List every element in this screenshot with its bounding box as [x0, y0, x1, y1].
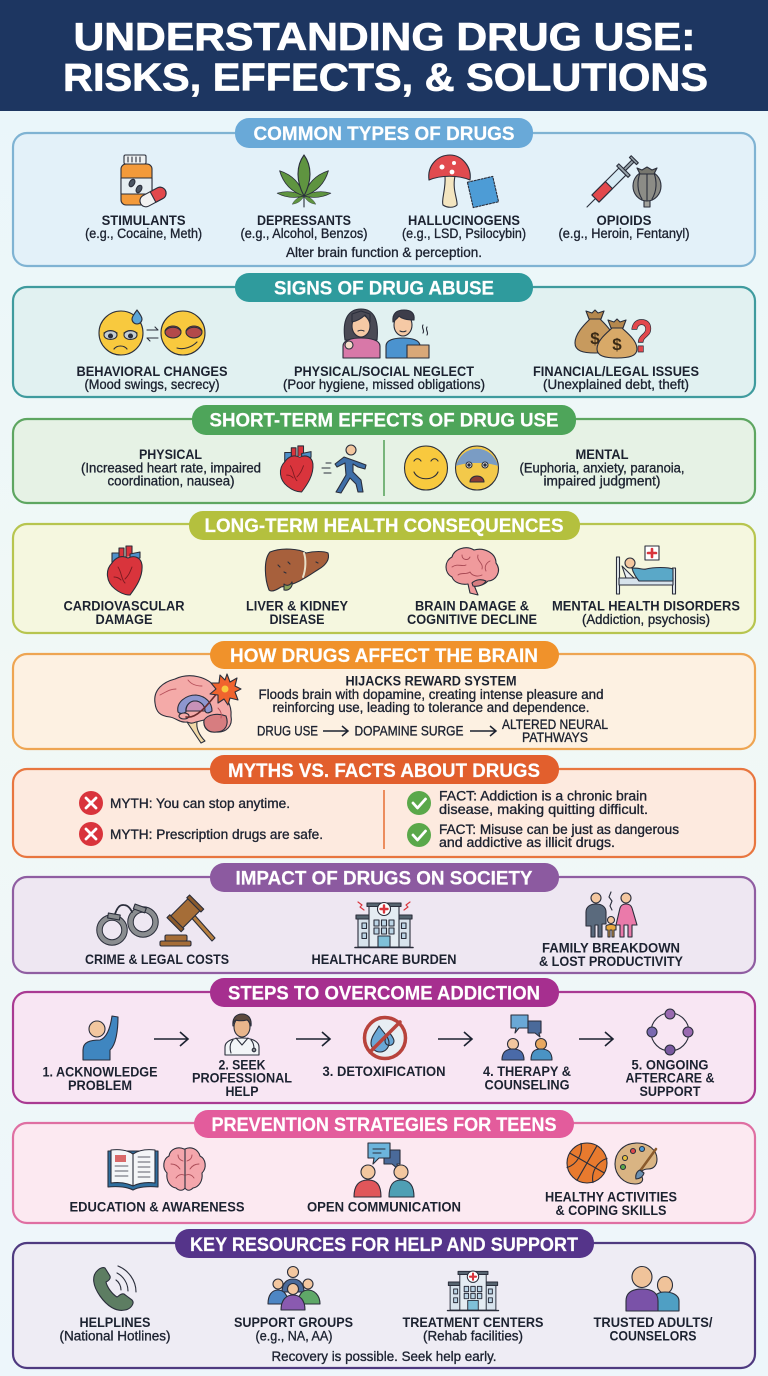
icon: mushroom and blotter	[429, 155, 499, 208]
panel: signs of drug abuse	[13, 273, 755, 397]
divider between myths and facts	[383, 790, 385, 849]
heading: KEY RESOURCES FOR HELP AND SUPPORT	[190, 1234, 578, 1256]
icon: syringe and poppy pod	[581, 154, 661, 213]
label: depressants	[240, 213, 368, 242]
label: opioids: OPIOIDS	[596, 213, 652, 229]
panel frame	[13, 133, 755, 266]
label: treatment centers: (Rehab facilities)	[423, 1328, 523, 1344]
heading	[192, 405, 576, 435]
heading: LONG-TERM HEALTH CONSEQUENCES	[204, 515, 564, 537]
icon: hospital with alarm	[355, 902, 413, 948]
label: stimulants: STIMULANTS	[102, 213, 186, 229]
label: hijacks reward system: reinforcing use, leading to tolerance and dependence.	[272, 700, 590, 716]
heading: HOW DRUGS AFFECT THE BRAIN	[230, 645, 538, 667]
label: step 5: 5. ONGOING	[632, 1057, 708, 1073]
arrow	[296, 1032, 330, 1046]
icon: money bags and question mark: ?	[630, 310, 653, 362]
label: support groups	[234, 1315, 353, 1344]
label: dopamine surge: DOPAMINE SURGE	[354, 724, 464, 740]
label: open communication: OPEN COMMUNICATION	[307, 1200, 461, 1216]
label: step 2: 2. SEEK	[218, 1057, 266, 1073]
heading: PREVENTION STRATEGIES FOR TEENS	[212, 1114, 556, 1136]
icon: myth cross	[79, 822, 103, 846]
icon: doctor	[225, 1014, 259, 1055]
panel frame	[13, 654, 755, 749]
label: financial/legal issues	[533, 364, 699, 393]
label: step 2: HELP	[226, 1084, 258, 1100]
label: step 2: PROFESSIONAL	[192, 1071, 292, 1087]
label: education and awareness: EDUCATION & AWARENESS	[70, 1200, 244, 1216]
label: step 1: 1. ACKNOWLEDGE	[42, 1065, 158, 1081]
icon: brain	[446, 548, 498, 595]
heading	[210, 863, 559, 892]
icon: family breakdown	[586, 892, 637, 937]
label: hijacks reward system: HIJACKS REWARD SYSTEM	[346, 674, 516, 690]
fact text: FACT: Misuse can be just as dangerous	[439, 822, 679, 838]
fact text: FACT: Addiction is a chronic brain	[439, 789, 647, 805]
icon: myth cross	[79, 791, 103, 815]
label: step 4	[483, 1064, 571, 1094]
label: family breakdown: & LOST PRODUCTIVITY	[539, 954, 683, 970]
myth text: MYTH: Prescription drugs are safe.	[110, 827, 323, 843]
label: depressants: DEPRESSANTS	[257, 213, 351, 229]
icon: heart	[107, 546, 142, 595]
icon: basketball	[560, 1136, 614, 1190]
panel: impact on society	[13, 863, 755, 973]
closing note: Recovery is possible. Seek help early.	[272, 1349, 496, 1365]
fact text: disease, making quitting difficult.	[439, 802, 648, 818]
fact text: and addictive as illicit drugs.	[439, 835, 615, 851]
label: cardiovascular damage: DAMAGE	[96, 612, 152, 628]
note: Alter brain function & perception.	[286, 245, 482, 261]
label: behavioral changes: (Mood swings, secrecy)	[84, 377, 220, 393]
panel: myths vs facts	[13, 755, 755, 857]
label: step 1	[42, 1065, 158, 1094]
label: helplines: HELPLINES	[80, 1315, 150, 1331]
label: family breakdown: FAMILY BREAKDOWN	[542, 941, 680, 957]
panel frame	[13, 1123, 755, 1223]
title banner: RISKS, EFFECTS, & SOLUTIONS	[63, 56, 708, 100]
flow: drug use to altered pathways	[257, 717, 608, 746]
icon: money bags and question mark: $	[590, 329, 600, 348]
label: step 5: AFTERCARE &	[626, 1071, 714, 1087]
heading: SIGNS OF DRUG ABUSE	[274, 278, 494, 300]
label: cardiovascular damage	[64, 599, 184, 628]
icon: money bags and question mark	[575, 310, 653, 362]
label: mental	[520, 447, 684, 490]
label: behavioral changes: BEHAVIORAL CHANGES	[76, 364, 228, 380]
icon: painter palette	[615, 1143, 657, 1184]
icon: raised hand	[83, 1016, 118, 1060]
label: stimulants	[85, 213, 202, 242]
label: step 1: PROBLEM	[68, 1078, 132, 1094]
label: physical: coordination, nausea)	[108, 474, 234, 490]
icon: brain	[164, 1148, 205, 1190]
label: healthy activities	[545, 1190, 677, 1219]
label: financial/legal issues: (Unexplained debt, theft)	[543, 377, 689, 393]
heading: COMMON TYPES OF DRUGS	[254, 123, 514, 145]
fact text	[439, 822, 679, 851]
panel: key resources	[13, 1229, 755, 1368]
label: physical/social neglect	[283, 364, 485, 393]
label: mental: (Euphoria, anxiety, paranoia,	[520, 460, 684, 476]
panel: steps to overcome addiction	[13, 978, 755, 1103]
label: step 5: SUPPORT	[640, 1084, 701, 1100]
label: mental health disorders: (Addiction, psychosis)	[582, 612, 710, 628]
icon: cannabis leaf	[276, 155, 332, 207]
label: physical	[81, 447, 261, 490]
label: healthcare burden: HEALTHCARE BURDEN	[312, 952, 456, 968]
label: family breakdown	[539, 941, 683, 970]
icon: no drugs sign	[364, 1018, 406, 1058]
panel frame	[13, 877, 755, 973]
icon: money bags and question mark: $	[612, 335, 622, 354]
label: step 4: COUNSELING	[484, 1078, 570, 1094]
icon: open communication	[354, 1143, 414, 1197]
label: healthy activities: & COPING SKILLS	[556, 1203, 666, 1219]
label: brain damage	[407, 599, 537, 628]
arrow	[438, 1032, 472, 1046]
label: mental: impaired judgment)	[544, 474, 660, 490]
label: mental health disorders	[552, 599, 740, 628]
label: treatment centers	[402, 1315, 544, 1344]
label: trusted adults: COUNSELORS	[610, 1328, 696, 1344]
label: hallucinogens: (e.g., LSD, Psilocybin)	[402, 226, 526, 242]
label: drug use: DRUG USE	[257, 724, 318, 740]
label: liver and kidney disease: LIVER & KIDNEY	[246, 599, 348, 615]
label: physical/social neglect: PHYSICAL/SOCIAL NEGLECT	[294, 364, 474, 380]
label: helplines	[60, 1315, 170, 1344]
myth text: MYTH: You can stop anytime.	[110, 796, 290, 812]
label: liver and kidney disease	[246, 599, 348, 628]
label: depressants: (e.g., Alcohol, Benzos)	[240, 226, 368, 242]
panel frame	[13, 419, 755, 503]
label: stimulants: (e.g., Cocaine, Meth)	[85, 226, 202, 242]
panel frame	[13, 992, 755, 1103]
label: mental health disorders: MENTAL HEALTH DISORDERS	[552, 599, 740, 615]
icon: fact check	[407, 823, 431, 847]
label: altered neural pathways: PATHWAYS	[522, 730, 588, 746]
label: hijacks reward system: Floods brain with dopamine, creating intense pleasure and	[258, 687, 604, 703]
label: behavioral changes	[76, 364, 228, 393]
label: trusted adults	[594, 1315, 713, 1344]
icon: treatment center	[447, 1271, 499, 1311]
label: helplines: (National Hotlines)	[60, 1328, 170, 1344]
icon: pill bottle	[121, 155, 168, 209]
icon: telephone	[94, 1266, 136, 1310]
icon: faces with swap arrows	[99, 310, 205, 355]
icon: handcuffs	[100, 904, 156, 942]
icon: heart	[280, 446, 313, 492]
label: brain damage: BRAIN DAMAGE &	[415, 599, 529, 615]
label: cardiovascular damage: CARDIOVASCULAR	[64, 599, 184, 615]
arrow	[579, 1032, 613, 1046]
icon: open book	[108, 1150, 158, 1190]
title banner	[0, 0, 768, 111]
heading: STEPS TO OVERCOME ADDICTION	[228, 982, 540, 1004]
panel: long-term consequences	[13, 511, 755, 633]
panel: prevention strategies	[13, 1110, 755, 1223]
arrow	[323, 726, 348, 736]
panel frame	[13, 769, 755, 857]
icon: therapy people	[502, 1015, 552, 1060]
label: physical/social neglect: (Poor hygiene, missed obligations)	[283, 377, 485, 393]
icon: liver	[265, 549, 329, 591]
arrow	[154, 1032, 188, 1046]
label: step 3: 3. DETOXIFICATION	[322, 1064, 446, 1080]
icon: scared face	[456, 446, 498, 490]
divider between physical and mental	[383, 440, 385, 496]
label: liver and kidney disease: DISEASE	[270, 612, 324, 628]
label: mental: MENTAL	[576, 447, 629, 463]
icon: gavel	[160, 895, 215, 946]
label: hallucinogens: HALLUCINOGENS	[408, 213, 520, 229]
heading: IMPACT OF DRUGS ON SOCIETY	[236, 868, 532, 890]
heading: SHORT-TERM EFFECTS OF DRUG USE	[210, 410, 558, 432]
label: healthy activities: HEALTHY ACTIVITIES	[545, 1190, 677, 1206]
heading	[235, 118, 533, 148]
label: altered neural pathways	[502, 717, 608, 746]
label: support groups: (e.g., NA, AA)	[256, 1328, 332, 1344]
icon: fact check	[407, 791, 431, 815]
icon: aftercare cycle	[647, 1009, 693, 1055]
label: hallucinogens	[402, 213, 526, 242]
panel: common types of drugs	[13, 118, 755, 266]
heading	[235, 273, 533, 302]
label: hijacks reward system	[258, 674, 604, 716]
panel frame	[13, 524, 755, 633]
label: opioids	[558, 213, 690, 242]
label: step 2	[192, 1057, 292, 1100]
label: treatment centers: TREATMENT CENTERS	[402, 1315, 544, 1331]
title banner: UNDERSTANDING DRUG USE:	[74, 16, 696, 59]
label: brain damage: COGNITIVE DECLINE	[407, 612, 537, 628]
panel frame	[13, 287, 755, 397]
icon: brain cross-section with burst	[155, 674, 241, 743]
icon: hospital bed	[616, 546, 676, 594]
arrow	[470, 726, 496, 736]
label: physical: PHYSICAL	[139, 447, 202, 463]
label: step 5	[626, 1057, 714, 1100]
label: physical: (Increased heart rate, impaired	[81, 460, 261, 476]
panel: how drugs affect the brain	[13, 641, 755, 749]
fact text	[439, 789, 648, 818]
icon: neglect people	[343, 309, 429, 358]
heading: MYTHS VS. FACTS ABOUT DRUGS	[228, 760, 540, 782]
label: crime and legal costs: CRIME & LEGAL COSTS	[85, 952, 229, 968]
label: support groups: SUPPORT GROUPS	[234, 1315, 353, 1331]
icon: smiling face	[404, 446, 448, 490]
icon: trusted adults	[626, 1266, 679, 1311]
label: step 4: 4. THERAPY &	[483, 1064, 571, 1080]
panel frame	[13, 1243, 755, 1368]
icon: stumbling runner	[322, 445, 366, 493]
label: trusted adults: TRUSTED ADULTS/	[594, 1315, 713, 1331]
label: altered neural pathways: ALTERED NEURAL	[502, 717, 608, 733]
label: financial/legal issues: FINANCIAL/LEGAL ISSUES	[533, 364, 699, 380]
icon: support group	[268, 1266, 320, 1310]
label: opioids: (e.g., Heroin, Fentanyl)	[558, 226, 690, 242]
panel: short-term effects	[13, 405, 755, 503]
